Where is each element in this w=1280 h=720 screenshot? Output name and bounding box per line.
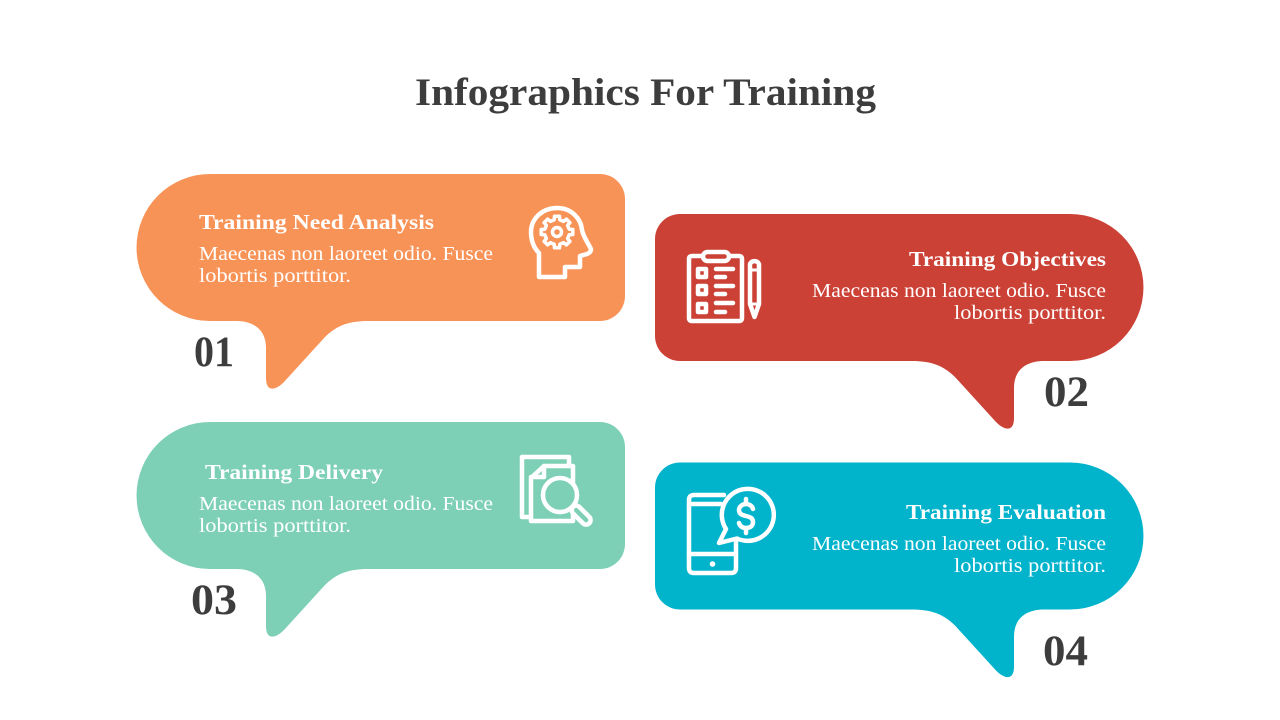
- icon: head with gear: [531, 208, 591, 277]
- body text: panel 3: Maecenas non laoreet odio. Fusce: [199, 493, 493, 515]
- speech bubble: blue: [655, 462, 1143, 677]
- panel: training delivery: [137, 422, 625, 637]
- panel: training need analysis: [137, 174, 625, 389]
- body text: panel 1: lobortis porttitor.: [199, 265, 351, 287]
- icon: documents with magnifier: [522, 457, 592, 526]
- heading: training evaluation: Training Evaluation: [906, 500, 1106, 524]
- heading: training need analysis: Training Need Analysis: [199, 210, 434, 234]
- number 04: 04: [1043, 628, 1088, 675]
- body text: panel 3: lobortis porttitor.: [199, 515, 351, 537]
- body text: panel 1: [199, 243, 493, 287]
- body text: panel 4: [812, 533, 1106, 577]
- body text: panel 1: Maecenas non laoreet odio. Fusce: [199, 243, 493, 265]
- heading: training delivery: Training Delivery: [205, 460, 384, 484]
- speech bubble: red: [655, 214, 1143, 429]
- body text: panel 2: lobortis porttitor.: [954, 302, 1106, 324]
- icon: clipboard and pencil: [689, 252, 759, 321]
- speech bubble: green: [137, 422, 625, 637]
- body text: panel 4: lobortis porttitor.: [954, 555, 1106, 577]
- speech bubble: orange: [137, 174, 625, 389]
- body text: panel 3: [199, 493, 493, 537]
- heading: training objectives: Training Objectives: [909, 247, 1106, 271]
- body text: panel 2: Maecenas non laoreet odio. Fusce: [812, 280, 1106, 302]
- number 01: 01: [194, 329, 234, 376]
- number 03: 03: [191, 577, 237, 624]
- number 02: 02: [1044, 369, 1089, 416]
- panel: training evaluation: [655, 462, 1143, 677]
- title: Infographics For Training: [415, 71, 877, 114]
- icon: phone with dollar bubble: [689, 489, 774, 573]
- body text: panel 4: Maecenas non laoreet odio. Fusce: [812, 533, 1106, 555]
- panel: training objectives: [655, 214, 1143, 429]
- body text: panel 2: [812, 280, 1106, 324]
